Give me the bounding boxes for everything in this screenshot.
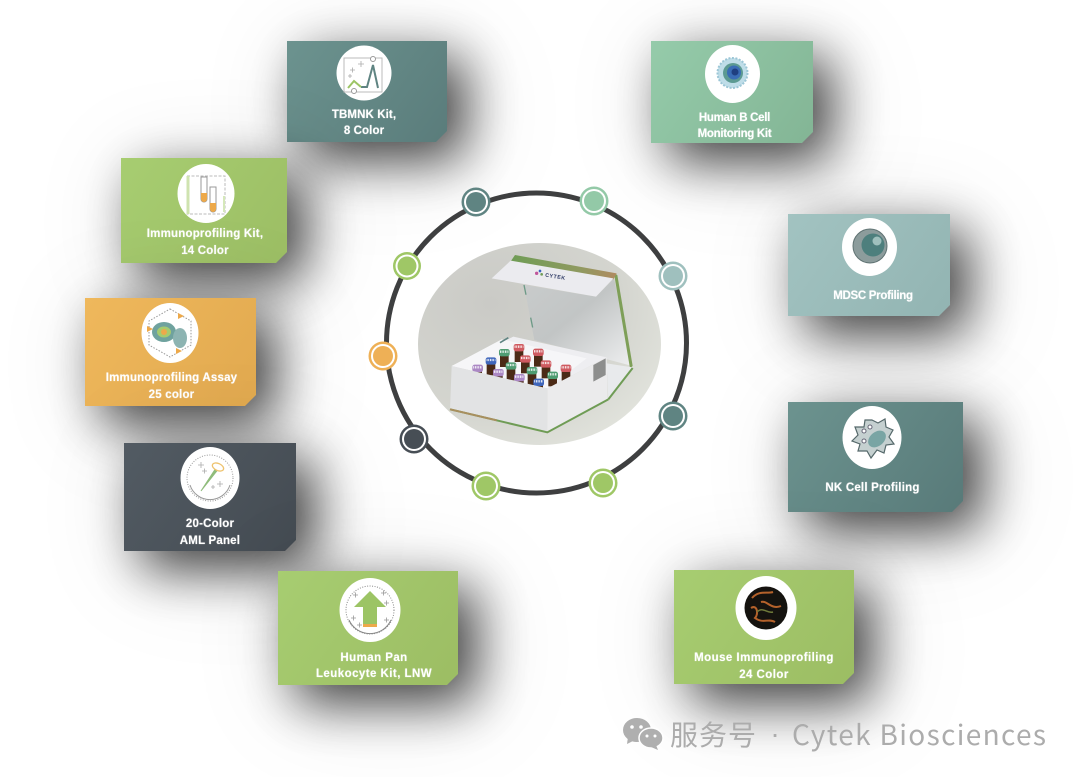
label: Human Pan Leukocyte Kit, LNW: Human Pan [340, 652, 408, 664]
watermark text: Cytek Biosciences [792, 714, 1047, 754]
icon: fluorescence image [736, 576, 796, 640]
photo: kit box [418, 243, 661, 445]
label: TBMNK Kit, 8 Color: 8 Color [344, 125, 384, 137]
label: NK Cell Profiling: NK Cell Profiling [825, 482, 920, 494]
label: 20-Color AML Panel: 20-Color [186, 518, 234, 530]
card: Human Pan Leukocyte Kit [248, 538, 522, 750]
node: dark [400, 424, 428, 454]
icon: MDSC cell [842, 218, 897, 276]
node: pale teal [658, 262, 688, 290]
icon: peak chart [336, 46, 392, 100]
label: Human Pan Leukocyte Kit, LNW [316, 652, 432, 680]
label: Immunoprofiling Assay 25 color: Immunoprofiling Assay [106, 372, 237, 384]
card: Mouse Immunoprofiling 24 Color [644, 538, 918, 750]
icon: dish with wand [180, 447, 240, 509]
icon: test tubes [178, 164, 234, 223]
node: orange [368, 342, 398, 370]
node: green lower right [588, 468, 618, 498]
card: Immunoprofiling Kit 14 Color [92, 126, 351, 324]
node: green upper left [393, 252, 421, 280]
card: Human B Cell Monitoring Kit [622, 8, 877, 208]
label: Immunoprofiling Assay 25 color [106, 372, 238, 400]
label: TBMNK Kit, 8 Color [332, 108, 396, 137]
icon: hexagon cell cluster [142, 303, 198, 363]
ring [386, 193, 686, 493]
label: 20-Color AML Panel: AML Panel [180, 534, 240, 546]
label: Immunoprofiling Assay 25 color: 25 color [149, 388, 194, 400]
label: Immunoprofiling Kit, 14 Color: Immunoprofiling Kit, [147, 228, 263, 240]
label: Mouse Immunoprofiling 24 Color [694, 652, 834, 680]
label: TBMNK Kit, 8 Color: TBMNK Kit, [332, 108, 396, 120]
node: teal [462, 188, 490, 216]
label: 20-Color AML Panel [180, 518, 240, 546]
card: MDSC Profiling [758, 182, 1014, 382]
watermark text: · [770, 718, 780, 749]
icon: NK cell [842, 406, 902, 469]
card: NK Cell Profiling [758, 370, 1027, 578]
label: Immunoprofiling Kit, 14 Color: 14 Color [181, 244, 229, 256]
node: light green [580, 186, 608, 216]
watermark text: 服务号 [670, 714, 757, 754]
label: Mouse Immunoprofiling 24 Color: 24 Color [739, 668, 789, 680]
icon: B cell [705, 45, 760, 103]
label: Mouse Immunoprofiling 24 Color: Mouse Immunoprofiling [694, 652, 834, 664]
label: Human B Cell Monitoring Kit [698, 112, 772, 140]
icon: green up arrow [340, 578, 400, 642]
vials [472, 344, 571, 389]
icon: WeChat [623, 718, 662, 750]
node: teal lower [658, 402, 688, 430]
label: MDSC Profiling: MDSC Profiling [833, 290, 913, 302]
card: Immunoprofiling Assay 25 color [56, 270, 320, 467]
card: 20-Color AML Panel [94, 415, 360, 616]
label: Immunoprofiling Kit, 14 Color [147, 228, 263, 256]
label: Human B Cell Monitoring Kit: Monitoring Kit [698, 128, 771, 140]
card: TBMNK Kit [258, 8, 511, 208]
node: green lower left [472, 472, 500, 500]
watermark [623, 714, 1047, 754]
photo: kit box: CYTEK [545, 273, 566, 282]
label: Human Pan Leukocyte Kit, LNW: Leukocyte Kit, LNW [316, 668, 432, 680]
label: Human B Cell Monitoring Kit: Human B Cell [699, 112, 770, 124]
watermark text [670, 714, 1047, 754]
